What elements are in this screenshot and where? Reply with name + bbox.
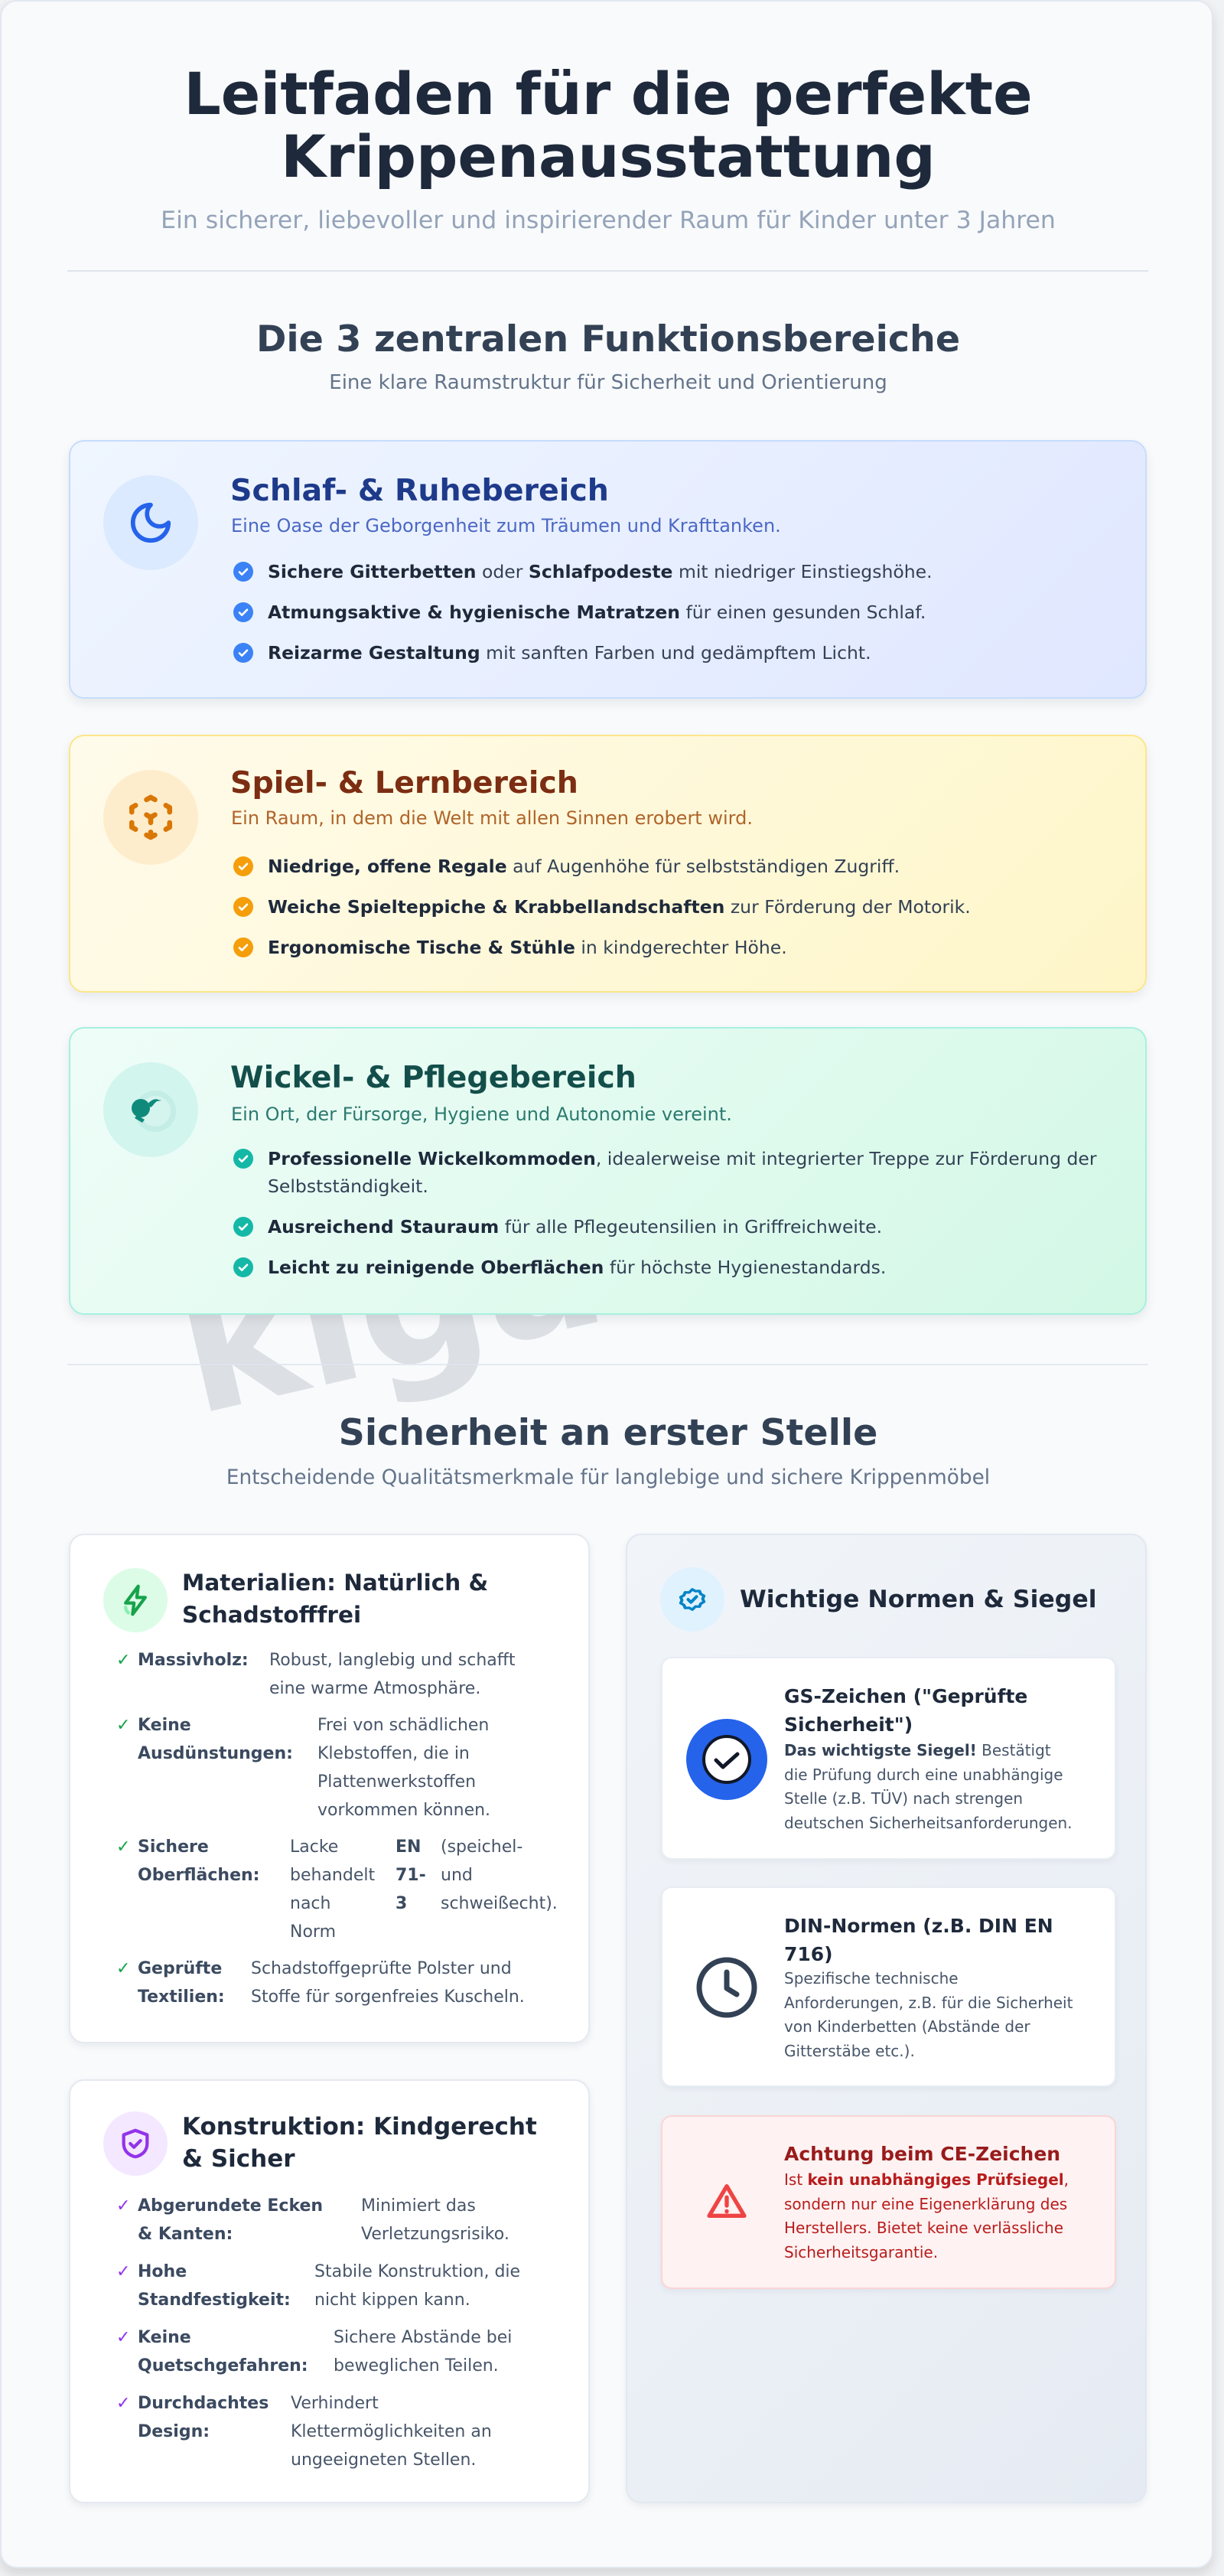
heading: Materialien: Natürlich & <box>182 1570 488 1596</box>
list: Ergonomische Tische & Stühle in kindgerechter Höhe. <box>268 937 787 958</box>
list: Stoffe für sorgenfreies Kuscheln. <box>251 1987 525 2007</box>
body: von Kinderbetten (Abstände der <box>784 2017 1030 2036</box>
subheading: Sicherheit: Entscheidende Qualitätsmerkmale für langlebige und sichere Krippenmöbel <box>226 1466 990 1489</box>
icon: materials <box>103 1568 168 1632</box>
card: GS-Zeichen <box>661 1657 1116 1860</box>
title: Sicherheit") <box>784 1714 913 1736</box>
list <box>116 1651 558 2007</box>
list: Design: <box>138 2422 210 2441</box>
list: Standfestigkeit: <box>138 2291 291 2310</box>
list: ✓ <box>116 1651 130 1670</box>
list: nicht kippen kann. <box>314 2291 470 2310</box>
list: Plattenwerkstoffen <box>317 1772 476 1792</box>
icon: care <box>103 1062 198 1157</box>
panel: Materialien <box>69 1534 590 2043</box>
heading: Wichtige Normen & Siegel <box>740 1586 1097 1613</box>
body <box>784 2170 1069 2261</box>
body: Anforderungen, z.B. für die Sicherheit <box>784 1994 1073 2012</box>
list: ✓ <box>116 2394 130 2413</box>
title: Krippenausstattung <box>281 122 936 191</box>
list: ✓ <box>116 1716 130 1735</box>
list: Quetschgefahren: <box>138 2356 308 2375</box>
title: DIN-Normen (z.B. DIN EN <box>784 1915 1053 1937</box>
body: Gitterstäbe etc.). <box>784 2042 915 2060</box>
list: Geprüfte <box>138 1959 222 1978</box>
list: und <box>441 1866 473 1885</box>
list <box>233 1148 1097 1278</box>
list: Klebstoffen, die in <box>317 1744 470 1763</box>
list: Weiche Spielteppiche & Krabbellandschaften zur Förderung der Motorik. <box>268 896 971 918</box>
list: Verletzungsrisiko. <box>361 2225 509 2244</box>
list: Niedrige, offene Regale auf Augenhöhe für selbstständigen Zugriff. <box>268 856 900 877</box>
list: Verhindert <box>291 2394 379 2413</box>
icon: clock <box>696 1958 757 2017</box>
subtitle: Ein Raum, in dem die Welt mit allen Sinnen erobert wird. <box>231 807 753 829</box>
body: Das wichtigste Siegel! Bestätigt <box>784 1741 1051 1759</box>
list: Sichere Gitterbetten oder Schlafpodeste mit niedriger Einstiegshöhe. <box>268 561 933 582</box>
watermark: kigato <box>160 1112 822 1456</box>
panel: Spiel- & Lernbereich <box>69 735 1147 993</box>
list: Keine <box>138 1716 191 1735</box>
list: ✓ <box>116 2196 130 2216</box>
title: Leitfaden für die perfekte <box>184 60 1033 128</box>
panel: Schlaf- & Ruhebereich <box>69 440 1147 699</box>
list: beweglichen Teilen. <box>334 2356 499 2375</box>
subtitle: Eine Oase der Geborgenheit zum Träumen und Krafttanken. <box>231 515 781 536</box>
title <box>184 60 1033 191</box>
list: Reizarme Gestaltung mit sanften Farben und gedämpftem Licht. <box>268 642 871 664</box>
list: Stabile Konstruktion, die <box>314 2262 520 2281</box>
list: & Kanten: <box>138 2225 233 2244</box>
list: behandelt <box>290 1866 375 1885</box>
panel: Normen & Siegel <box>626 1534 1147 2503</box>
list: schweißecht). <box>441 1894 558 1913</box>
list: Lacke <box>290 1837 338 1857</box>
list: Professionelle Wickelkommoden, idealerweise mit integrierter Treppe zur Förderung der <box>268 1148 1097 1169</box>
list: ✓ <box>116 1837 130 1857</box>
list: nach <box>290 1894 330 1913</box>
list: EN <box>396 1837 421 1857</box>
list <box>233 856 971 958</box>
list: Sichere <box>138 1837 209 1857</box>
heading: Schlaf- & Ruhebereich <box>230 473 609 508</box>
body: Herstellers. Bietet keine verlässliche <box>784 2219 1063 2237</box>
heading: Sicherheit: Sicherheit an erster Stelle <box>339 1412 877 1454</box>
list: Ausreichend Stauraum für alle Pflegeutensilien in Griffreichweite. <box>268 1216 882 1237</box>
list: vorkommen können. <box>317 1801 490 1820</box>
list: ✓ <box>116 2262 130 2281</box>
list: Norm <box>290 1922 336 1942</box>
body: Spezifische technische <box>784 1969 959 1987</box>
list: 71- <box>396 1866 426 1885</box>
list: Textilien: <box>138 1987 225 2007</box>
list: Selbstständigkeit. <box>268 1176 428 1197</box>
panel: Wickel- & Pflegebereich <box>69 1027 1147 1315</box>
list: Klettermöglichkeiten an <box>291 2422 492 2441</box>
list: (speichel- <box>441 1837 522 1857</box>
body <box>784 1969 1073 2060</box>
icon: badge <box>660 1567 724 1632</box>
body: sondern nur eine Eigenerklärung des <box>784 2195 1067 2213</box>
list: Ausdünstungen: <box>138 1744 293 1763</box>
subheading: Funktionsbereiche: Eine klare Raumstruktur für Sicherheit und Orientierung <box>329 371 887 394</box>
title: Achtung beim CE-Zeichen <box>784 2143 1060 2165</box>
body <box>784 1741 1073 1832</box>
list <box>233 561 933 664</box>
title: 716) <box>784 1943 833 1965</box>
list: Minimiert das <box>361 2196 476 2216</box>
list: Frei von schädlichen <box>317 1716 489 1735</box>
card: DIN-Normen <box>661 1886 1116 2087</box>
heading: & Sicher <box>182 2145 295 2173</box>
panel: Konstruktion <box>69 2079 590 2503</box>
list: Durchdachtes <box>138 2394 269 2413</box>
heading: Wickel- & Pflegebereich <box>230 1060 636 1095</box>
list: Atmungsaktive & hygienische Matratzen für einen gesunden Schlaf. <box>268 602 926 623</box>
body: deutschen Sicherheitsanforderungen. <box>784 1814 1073 1832</box>
list: 3 <box>396 1894 407 1913</box>
list: ✓ <box>116 1959 130 1978</box>
icon: warning <box>707 2184 747 2218</box>
icon: moon <box>103 475 198 570</box>
heading: Funktionsbereiche: Die 3 zentralen Funktionsbereiche <box>256 318 960 360</box>
list: Sichere Abstände bei <box>334 2328 512 2347</box>
list: Leicht zu reinigende Oberflächen für höchste Hygienestandards. <box>268 1257 886 1278</box>
title <box>784 1915 1053 1965</box>
title <box>784 1685 1027 1736</box>
icon: shield <box>103 2111 168 2176</box>
list: Abgerundete Ecken <box>138 2196 323 2216</box>
list: Oberflächen: <box>138 1866 259 1885</box>
icon: GS check <box>686 1719 767 1800</box>
body: Stelle (z.B. TÜV) nach strengen <box>784 1789 1023 1808</box>
list: Schadstoffgeprüfte Polster und <box>251 1959 512 1978</box>
list: ungeeigneten Stellen. <box>291 2450 476 2470</box>
heading: Konstruktion: Kindgerecht <box>182 2113 537 2141</box>
heading: Spiel- & Lernbereich <box>230 765 578 801</box>
icon: cube <box>103 770 198 865</box>
list <box>116 2196 520 2470</box>
list: Keine <box>138 2328 191 2347</box>
title: GS-Zeichen ("Geprüfte <box>784 1685 1027 1707</box>
heading <box>182 1570 488 1628</box>
list: Robust, langlebig und schafft <box>269 1651 516 1670</box>
body: die Prüfung durch eine unabhängige <box>784 1766 1063 1784</box>
list: Hohe <box>138 2262 187 2281</box>
list: Massivholz: <box>138 1651 249 1670</box>
body: Sicherheitsgarantie. <box>784 2243 938 2261</box>
heading: Schadstofffrei <box>182 1602 361 1628</box>
body: Ist kein unabhängiges Prüfsiegel, <box>784 2170 1069 2189</box>
heading <box>182 2113 537 2173</box>
list: eine warme Atmosphäre. <box>269 1679 480 1698</box>
list: ✓ <box>116 2328 130 2347</box>
subtitle: Ein Ort, der Fürsorge, Hygiene und Autonomie vereint. <box>231 1104 732 1125</box>
subtitle: Ein sicherer, liebevoller und inspirierender Raum für Kinder unter 3 Jahren <box>161 207 1056 234</box>
callout: CE-Zeichen warning <box>661 2115 1116 2289</box>
